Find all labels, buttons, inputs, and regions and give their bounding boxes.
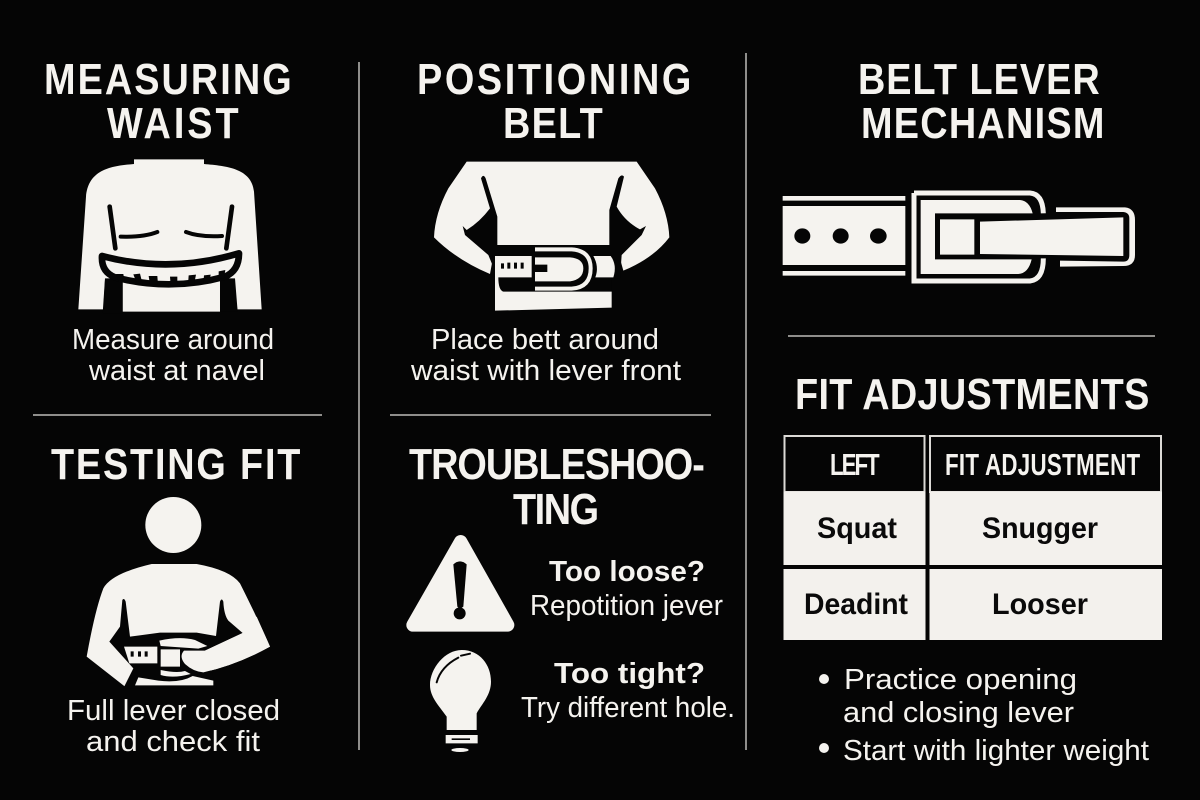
text: too loose: Repotition jever xyxy=(530,590,723,622)
heading: belt lever mechanism xyxy=(858,54,1104,148)
heading: measuring waist: MEASURING xyxy=(44,54,292,104)
text: too loose: Too loose? xyxy=(549,556,705,588)
panel: positioning belt xyxy=(410,54,691,387)
bullet list: tips xyxy=(819,664,1149,767)
panel: fit adjustments xyxy=(784,369,1162,767)
icon: belt lever xyxy=(783,193,1135,281)
text: too tight: Try different hole. xyxy=(521,692,735,724)
icon: light bulb xyxy=(430,650,491,752)
heading: measuring waist xyxy=(44,54,292,148)
heading: troubleshooting: TING xyxy=(513,484,599,534)
panel: testing fit xyxy=(51,439,300,758)
heading: positioning belt xyxy=(417,54,691,148)
table: fit adjustments: FIT ADJUSTMENT xyxy=(945,447,1141,482)
heading: belt lever mechanism: BELT LEVER xyxy=(858,54,1100,104)
caption: place belt around waist: Place bett around xyxy=(431,324,659,356)
heading: positioning belt: BELT xyxy=(503,98,603,148)
caption: measure around waist: Measure around xyxy=(72,324,274,356)
bullet list: tips: Start with lighter weight xyxy=(843,735,1149,767)
heading: fit adjustments: FIT ADJUSTMENTS xyxy=(795,369,1149,419)
caption: place belt around waist: waist with lever front xyxy=(410,355,681,387)
caption: measure around waist: waist at navel xyxy=(88,355,265,387)
heading: positioning belt: POSITIONING xyxy=(417,54,691,104)
text: too tight xyxy=(521,658,735,724)
text: too loose xyxy=(530,556,723,622)
bullet list: tips: and closing lever xyxy=(843,697,1075,729)
table: fit adjustments xyxy=(784,436,1162,640)
heading: troubleshooting: TROUBLESHOO- xyxy=(409,439,705,489)
caption: full lever closed: and check fit xyxy=(86,726,260,758)
caption: place belt around waist xyxy=(410,324,681,387)
table: fit adjustments: LEFT xyxy=(830,447,880,482)
icon: person closing belt xyxy=(87,497,270,688)
table: fit adjustments: Looser xyxy=(992,588,1088,621)
bullet list: tips: Practice opening xyxy=(844,664,1077,696)
heading: measuring waist: WAIST xyxy=(107,98,239,148)
heading: belt lever mechanism: MECHANISM xyxy=(861,98,1104,148)
icon: torso with measuring tape xyxy=(78,159,262,313)
table: fit adjustments: Snugger xyxy=(982,512,1098,545)
heading: troubleshooting xyxy=(409,439,705,534)
icon: warning triangle xyxy=(413,542,508,625)
table: fit adjustments: Deadint xyxy=(804,588,908,621)
caption: measure around waist xyxy=(72,324,274,387)
icon: torso with belt xyxy=(434,162,669,311)
panel: belt lever mechanism xyxy=(783,54,1135,281)
table: fit adjustments: Squat xyxy=(817,512,897,545)
caption: full lever closed xyxy=(67,695,280,758)
text: too tight: Too tight? xyxy=(554,658,705,690)
panel: troubleshooting xyxy=(409,439,735,752)
caption: full lever closed: Full lever closed xyxy=(67,695,280,727)
panel: measuring waist xyxy=(44,54,292,387)
heading: testing fit: TESTING FIT xyxy=(51,439,300,489)
